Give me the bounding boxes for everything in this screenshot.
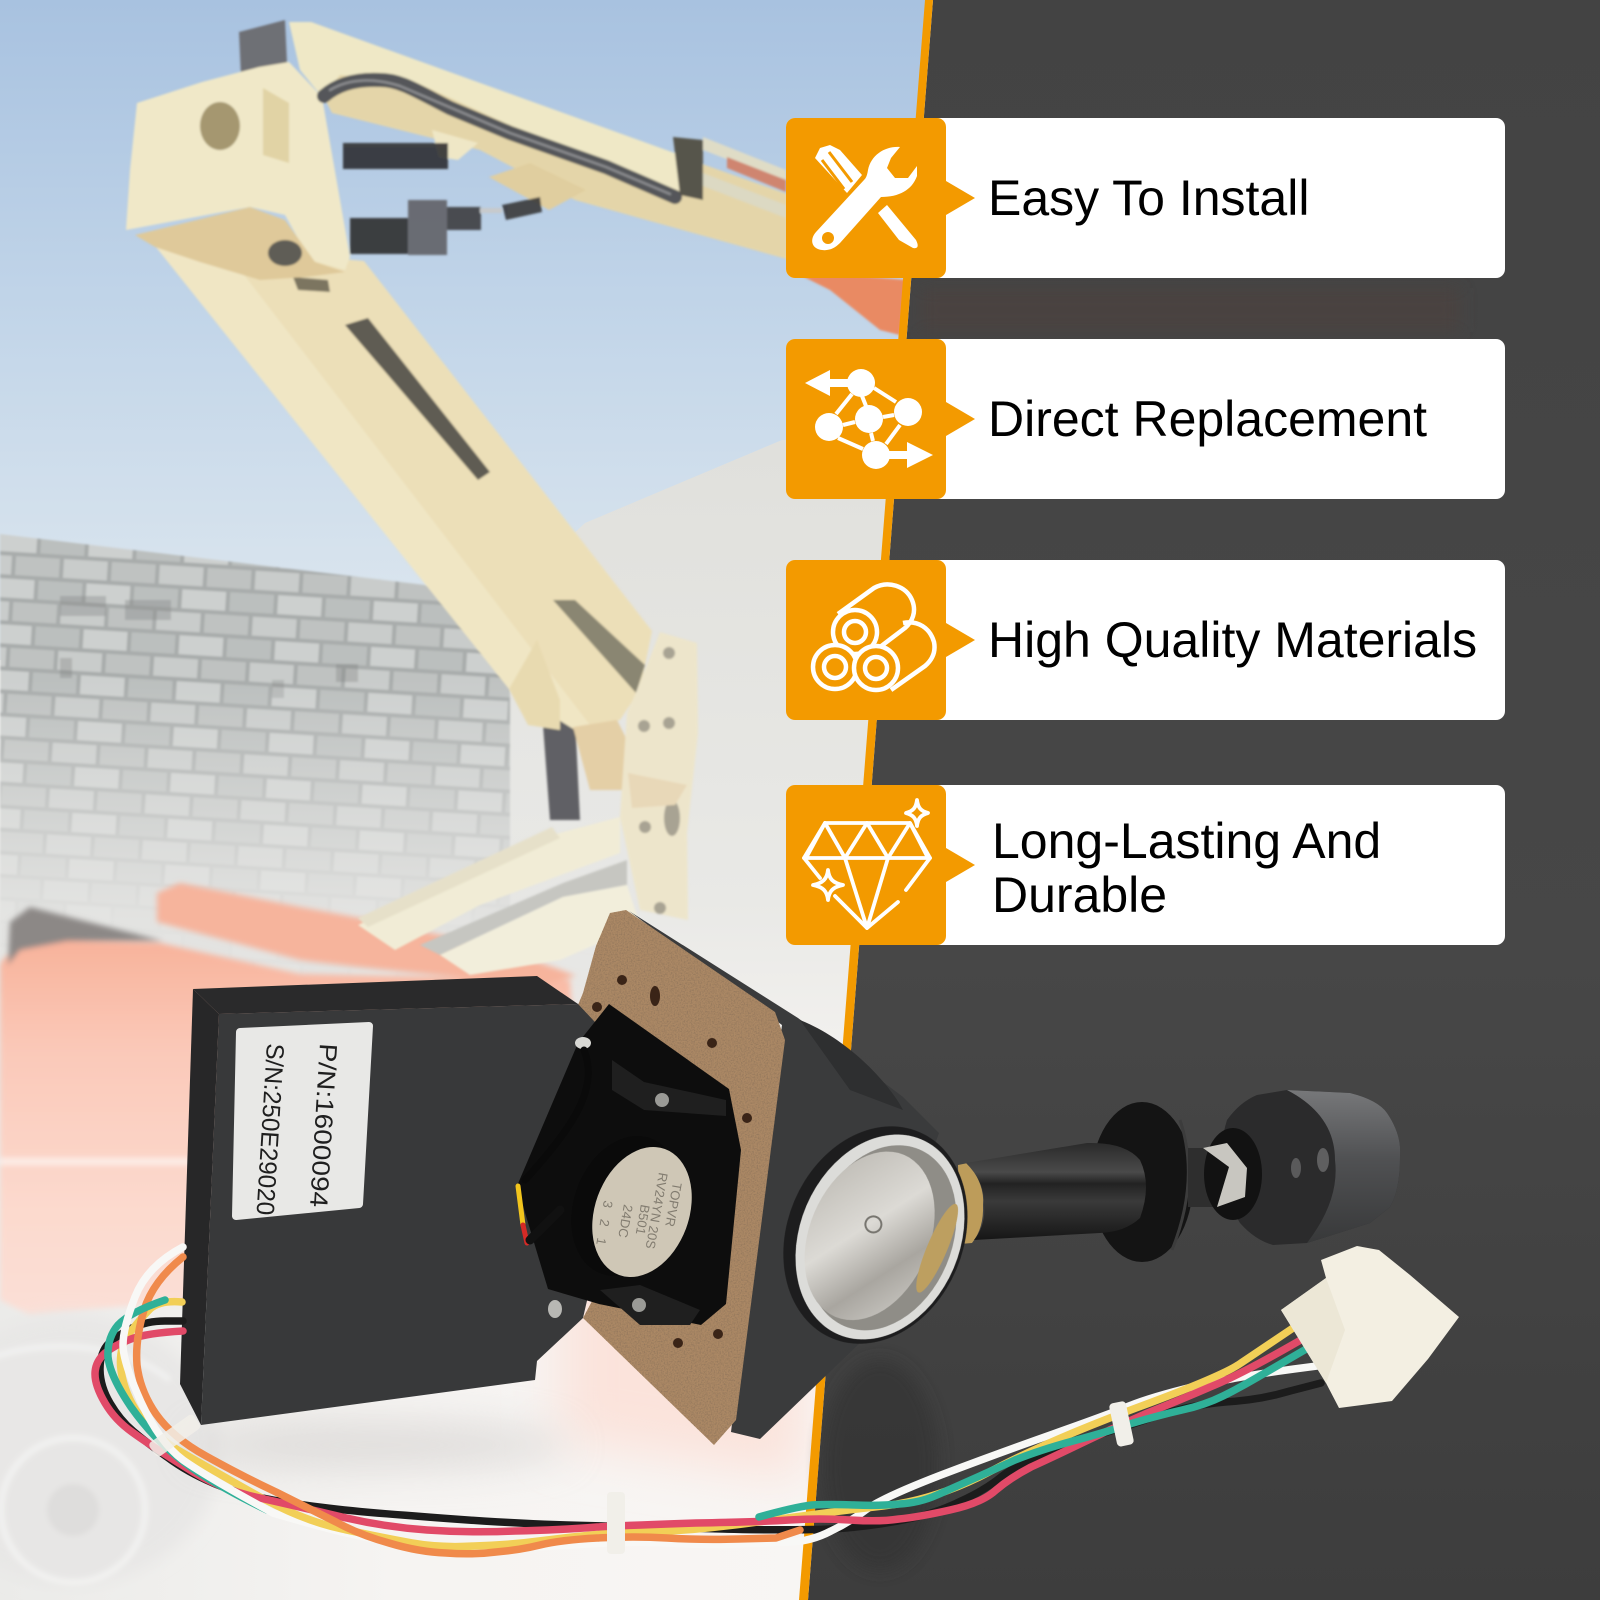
mounting screws: [655, 1093, 669, 1107]
knob: [1221, 1090, 1400, 1245]
upper boom brackets: [432, 130, 478, 160]
hinge plate: [620, 632, 698, 920]
label: Long-Lasting And Durable: Durable: [992, 867, 1167, 923]
lower lug: [509, 640, 560, 730]
feature card: High Quality Materials: [786, 560, 1505, 720]
part number label: P/N:1600094: [304, 1043, 342, 1208]
boom head: [126, 62, 350, 270]
shaft: [966, 1143, 1146, 1240]
ghost tire: [46, 1390, 203, 1538]
wire harness: [95, 1247, 1348, 1554]
brick wall: [0, 534, 511, 916]
hoses: [324, 80, 675, 197]
washer: [1204, 1128, 1262, 1220]
sky: [0, 0, 940, 660]
potentiometer with printed text: 24DC: [615, 1203, 636, 1239]
mechanism opening: [517, 1004, 741, 1325]
aerial lift boom: [126, 20, 906, 975]
potentiometer with printed text: [553, 1121, 709, 1291]
faint ghost machine in panel: [920, 288, 1460, 332]
part number label: [236, 1026, 369, 1216]
feature card: Direct Replacement: [786, 339, 1505, 499]
label: Long-Lasting And Durable: Long-Lasting And: [992, 813, 1381, 869]
housing behind gasket: [629, 911, 939, 1439]
brass collar: [958, 1163, 983, 1244]
potentiometer with printed text: RV24YN 20S: [643, 1171, 671, 1250]
potentiometer with printed text: TOPVR: [662, 1181, 685, 1228]
white connector plug: [1281, 1246, 1459, 1408]
hydraulic cylinder: [542, 720, 582, 822]
lower haze: [0, 713, 511, 920]
hydraulic cylinders: [343, 143, 542, 255]
dark block: [239, 20, 287, 77]
black control box: [180, 976, 640, 1425]
ghost tire in panel: [822, 1360, 938, 1570]
label: Direct Replacement: Direct Replacement: [988, 391, 1427, 447]
nut: [1203, 1143, 1247, 1207]
orange badge with rolled tubes icon: [786, 560, 946, 720]
orange badge with wrench and screwdriver icon: [786, 118, 946, 278]
cork gasket: [555, 910, 785, 1445]
orange badge with diamond icon: [786, 785, 946, 945]
drag chain: [673, 137, 703, 200]
orange badge with network icon: [786, 339, 946, 499]
feature card: Long-Lasting And Durable: [786, 785, 1505, 945]
flange: [1091, 1102, 1193, 1262]
orange lift section: [803, 278, 903, 336]
bright bolt holes: [575, 1037, 591, 1049]
pale pink glow right of box: [550, 1300, 814, 1484]
ground: [0, 1100, 810, 1600]
orange machine body: [0, 883, 590, 1315]
part number label: S/N:250E29020: [251, 1043, 289, 1216]
lower pale arms: [358, 817, 620, 950]
potentiometer with printed text: B501: [633, 1203, 653, 1236]
soft shadow beneath product: [190, 1421, 570, 1469]
label: Easy To Install: Easy To Install: [988, 170, 1309, 226]
concrete wall: [510, 440, 886, 1044]
arm slots: [345, 318, 490, 480]
feature card: Easy To Install: [786, 118, 1505, 278]
metal base ring and disc: [751, 1098, 1000, 1373]
arm top tan section: [135, 207, 345, 280]
neck: [1188, 1148, 1226, 1207]
dark panel background: [808, 0, 1600, 1600]
label: High Quality Materials: High Quality Materials: [988, 612, 1477, 668]
small black and colored leads: [518, 1050, 588, 1243]
joystick handle: [958, 1090, 1400, 1262]
background photo: aerial lift against sky and walls: [0, 0, 940, 1600]
product: joystick controller: [95, 910, 1459, 1554]
cable ties: [148, 1401, 1134, 1554]
orange diagonal divider: [799, 0, 933, 1600]
gasket holes: [592, 975, 752, 1348]
upper boom: [326, 74, 786, 260]
label: Long-Lasting And Durable: [992, 813, 1381, 923]
main lower arm: [245, 259, 652, 725]
potentiometer with printed text: 3 2 1: [593, 1199, 616, 1250]
